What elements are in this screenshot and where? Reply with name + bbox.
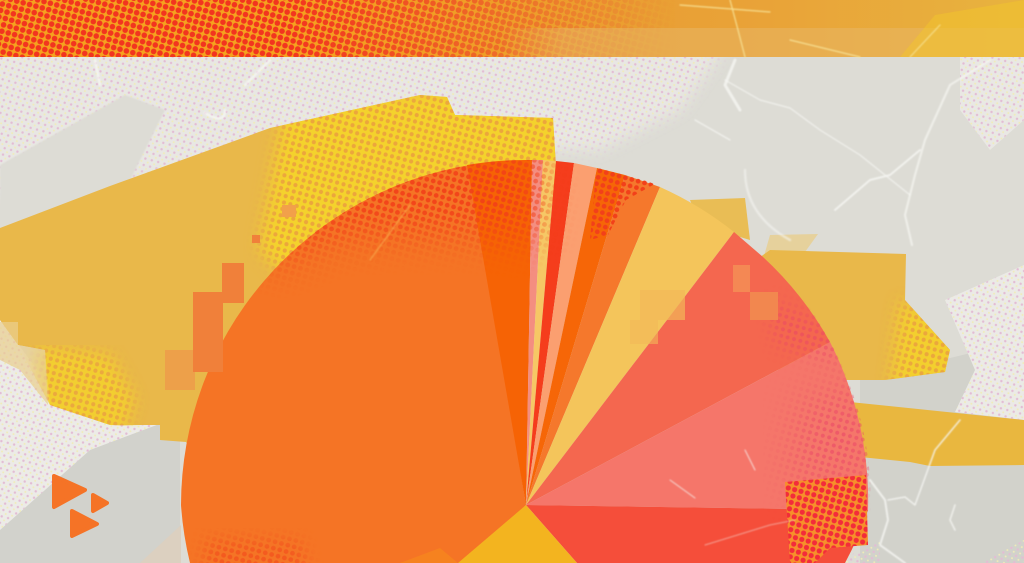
slice: largest orange [181, 165, 526, 563]
slice: pale yellow [526, 160, 556, 505]
icon: small triangle [93, 495, 107, 511]
slice: red bottom [526, 505, 868, 563]
slice: yellow bottom [458, 505, 577, 563]
slice: dark orange [467, 160, 532, 505]
pixel blocks [165, 205, 778, 390]
slice: deep orange [526, 168, 625, 505]
icon: large triangle [54, 476, 85, 507]
slice: light pink [526, 342, 868, 510]
slice: light orange [526, 175, 660, 505]
yellow brush stroke: lower right [850, 402, 1024, 466]
halftone over pie rim [200, 160, 871, 563]
slice: salmon [526, 232, 830, 505]
logo: three triangles [54, 476, 107, 536]
pie chart [181, 160, 868, 563]
slice: red [526, 161, 574, 505]
yellow brush stroke: left [0, 95, 556, 443]
small orange notch [400, 548, 458, 563]
slice: peach [526, 163, 597, 505]
slice: pink [526, 160, 543, 505]
top banner strip [0, 0, 1024, 57]
yellow brush stroke: upper right [690, 198, 950, 380]
slice: yellow [526, 187, 734, 505]
icon: medium triangle [72, 511, 97, 536]
